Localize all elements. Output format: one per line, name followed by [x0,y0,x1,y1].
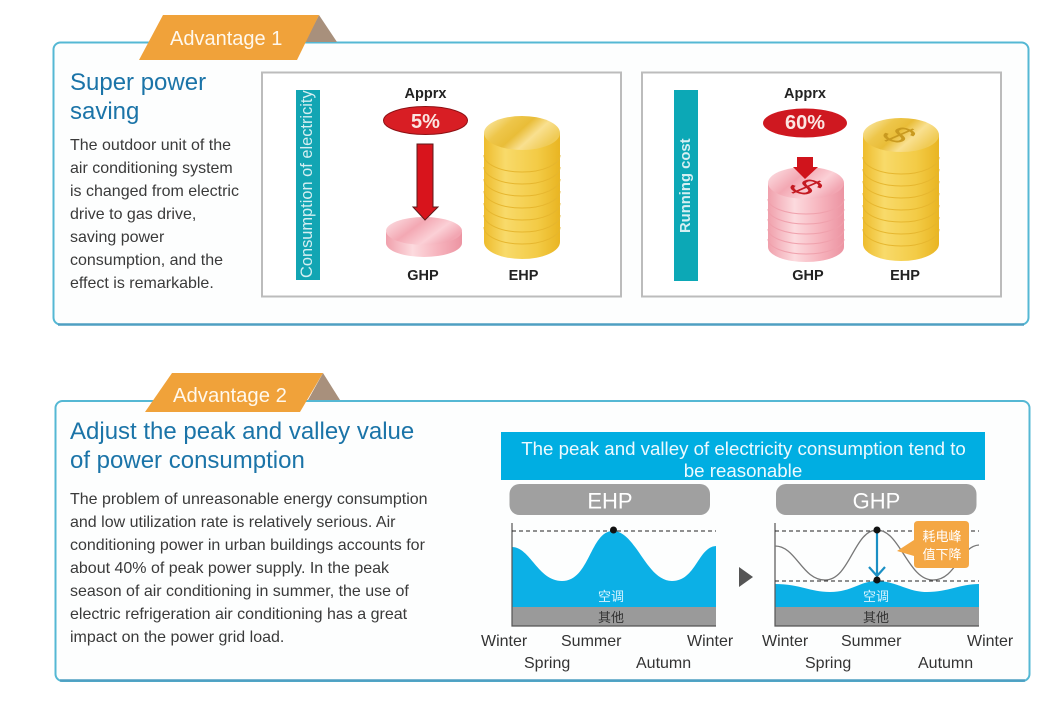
label: apprx: Apprx [784,86,826,102]
axis label: running cost: Running cost [678,138,694,233]
marker: peak [610,526,617,534]
heading: adjust the peak and valley: of power consumption [70,447,305,474]
chart: GHP seasonal load [762,484,1014,672]
label: air conditioning: 空调 [863,589,889,604]
arrow: down to GHP [793,157,818,179]
line: previous load curve [775,530,979,580]
season labels: Summer [561,633,622,650]
tab: advantage 2: Advantage 2 [173,385,287,407]
text block: advantage 1 description: effect is remarkable. [70,275,214,292]
label: other: 其他 [863,610,889,625]
badge: 5%: 5% [411,111,440,133]
season labels: Spring [805,655,851,672]
tab: advantage 2 [145,373,340,412]
text block: advantage 2 description: impact on the power grid load. [70,629,284,646]
badge: 60% [763,108,847,138]
season labels [762,633,1014,672]
badge: 5% [384,106,468,134]
pill: EHP [510,484,710,515]
season labels: Autumn [918,655,973,672]
chart: consumption of electricity [262,72,621,296]
label: GHP: GHP [407,268,439,284]
pill: GHP: GHP [853,488,900,514]
gold stack: EHP [863,118,939,261]
pill: EHP: EHP [587,488,633,514]
text block: advantage 2 description: conditioning power in urban buildings accounts for [70,537,426,554]
season labels: Winter [762,633,809,650]
season labels: Winter [481,633,528,650]
callout: peak consumption drops: 值下降 [922,547,962,562]
arrow: down to GHP [413,144,438,220]
banner: peak and valley: be reasonable [684,460,802,481]
tab: advantage 1: Advantage 1 [170,28,282,50]
text block: advantage 1 description: The outdoor unit of the [70,137,231,154]
badge: 60%: 60% [785,112,825,134]
text block: advantage 1 description: air conditioning system [70,160,233,177]
icon: dollar on pink stack: $ [778,174,834,200]
text block: advantage 2 description: season of air conditioning in summer, the use of [70,583,409,600]
chart: EHP seasonal load [481,484,734,672]
text block: advantage 1 description: consumption, and the [70,252,223,269]
heading: adjust the peak and valley: Adjust the peak and valley value [70,418,414,445]
banner: peak and valley: The peak and valley of electricity consumption tend to [521,438,966,459]
label: other: 其他 [598,610,624,625]
axis label: consumption of electricity: Consumption of electricity [298,90,316,278]
pill: GHP [776,484,976,515]
heading: super power saving: Super power [70,69,206,96]
panel: advantage 1 [54,15,1028,324]
markers [874,526,880,584]
axis label: running cost [674,90,698,281]
gold stack: EHP: $ [871,122,927,148]
season labels: Spring [524,655,570,672]
season labels: Winter [687,633,734,650]
area: air conditioning [775,581,979,607]
chart: running cost [642,72,1001,296]
label: EHP: EHP [509,268,539,284]
label: EHP: EHP [890,268,920,284]
pink disc: GHP [386,217,462,257]
arrow: EHP to GHP [739,567,753,587]
text block: advantage 2 description: about 40% of peak power supply. In the peak [70,560,390,577]
label: air conditioning: 空调 [598,589,624,604]
area: other [512,607,716,626]
area: air conditioning [512,531,716,607]
season labels [481,633,734,672]
callout: peak consumption drops [897,521,969,568]
label: apprx: Apprx [405,86,446,102]
heading: super power saving: saving [70,98,139,125]
text block: advantage 2 description: The problem of unreasonable energy consumption [70,491,428,508]
text block: advantage 2 description: electric refrigeration air conditioning has a great [70,606,408,623]
panel: advantage 2 [56,373,1030,681]
gold stack: EHP [484,116,560,259]
season labels: Summer [841,633,902,650]
text block: advantage 1 description: saving power [70,229,165,246]
arrow: peak reduction [869,531,885,576]
area: other [775,607,979,626]
season labels: Autumn [636,655,691,672]
pink stack: GHP [768,167,844,262]
banner: peak and valley [501,432,985,481]
callout: peak consumption drops: 耗电峰 [922,529,962,544]
text block: advantage 2 description: and low utilization rate is relatively serious. Air [70,514,396,531]
label: GHP: GHP [792,268,824,284]
text block: advantage 1 description: drive to gas drive, [70,206,196,223]
tab: advantage 1 [139,15,337,60]
season labels: Winter [967,633,1014,650]
text block: advantage 1 description: is changed from electric [70,183,239,200]
